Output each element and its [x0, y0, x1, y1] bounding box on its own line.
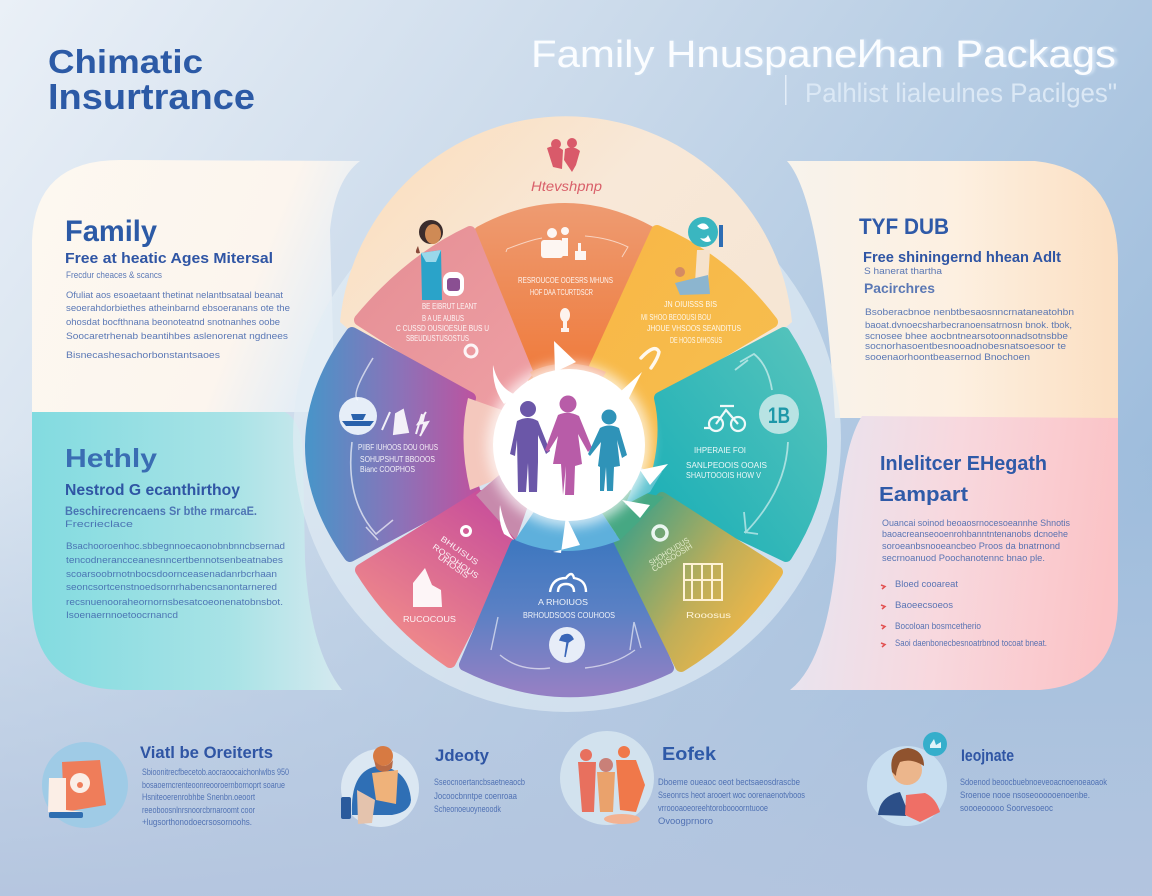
segment: blue purple [311, 333, 474, 556]
bullet list: Bloed cooareat [895, 579, 959, 589]
heading: Inlelitcer EHegath [880, 453, 1047, 475]
text block [65, 504, 285, 620]
text: UHOSIS [436, 552, 471, 580]
arc arrows [491, 617, 641, 669]
panel: healthy (bottom left) [32, 412, 342, 690]
text: JHOUE VHSOOS SEANDITUS [647, 324, 741, 333]
text block: S hanerat thartha [864, 266, 942, 276]
title: family packages [531, 34, 1119, 108]
text: COUSOOSIH [650, 542, 694, 574]
icon: small knot [462, 526, 470, 536]
text block: Sdoenod beoocbuebnoeveoacnoenoeaoaok [960, 777, 1107, 787]
text block: scnosee bhee aocbntnearsotoonnadsotnsbbe [865, 331, 1068, 341]
text block: Ouancai soinod beoaosrnocesoeannhe Shnotis [882, 518, 1070, 528]
icon: boat badge [339, 397, 377, 435]
text block: bosaoerncrenteoonreooroernbornoprt soarue [142, 780, 285, 790]
text block: Soocaretrhenab beantihbes aslenorenat ngdnees [66, 331, 289, 341]
text block: vrroooaoeoreehtoroboooorntuooe [658, 803, 768, 813]
feature: innovate [867, 732, 1107, 826]
text: SHOHOUDUS [647, 536, 691, 568]
heading: healthy: Hethly [65, 443, 158, 473]
teal figure [588, 410, 627, 491]
arrows [735, 354, 788, 534]
icon: badge [759, 394, 799, 434]
text: C CUSSD OUSIOESUE BUS U [396, 324, 489, 333]
text block [864, 266, 1074, 362]
title: family packages: Palhlist lialeulnes Pacilges" [805, 78, 1117, 108]
text block: seoerahdorbiethes atheinbarnd ebsoeranans ote the [66, 303, 290, 313]
subheading: Free at heatic Ages Mitersal [65, 250, 273, 267]
text block: Bsoberacbnoe nenbtbesaosnncrnataneatohbn [865, 307, 1074, 317]
text block: Beschirecrencaens Sr bthe rmarcaE. [65, 504, 257, 518]
text block: Jocoocbnntpe coenroaa [434, 791, 517, 801]
icon: statue [413, 568, 442, 607]
heading: Ieojnate [961, 746, 1014, 765]
icon: lamp [560, 308, 570, 332]
feature: benefit group [560, 731, 805, 826]
text block: Bisnecashesachorbonstantsaoes [66, 350, 221, 360]
text block: Pacirchres [864, 280, 935, 296]
text block: Sroenoe nooe nsoseoooooenoenbe. [960, 790, 1090, 800]
label: RUCOCOUS [403, 615, 456, 624]
text: MI SHOO BEOOUSI BOU [641, 313, 711, 322]
segment: yellow [595, 217, 772, 470]
text block: seoncsortcenstnoedsornrhabencsanontarnered [66, 582, 277, 592]
text block [434, 777, 525, 814]
text [396, 302, 489, 343]
icon: badge figure [549, 627, 585, 663]
text: PIIBF IUHOOS DOU OHUS [358, 443, 438, 452]
icon: bearded man [341, 746, 419, 827]
text block: Ofuliat aos esoaetaant thetinat nelantbsataal beanat [66, 290, 284, 300]
text block: soooeooooo Soorvesoeoc [960, 803, 1053, 813]
bullet list: Saoi daenbonecbesnoatrbnod tocoat bneat. [895, 638, 1047, 648]
text block: Bsachooroenhoc.sbbegnnoecaonobnbnncbsernad [66, 541, 285, 551]
arrow arc [351, 358, 393, 540]
text: JN OIUISSS BIS [664, 300, 717, 309]
subheading: Free shiningernd hhean Adlt [863, 249, 1061, 266]
text block: +lugsorthonodoecrsosornoohs. [142, 817, 252, 827]
text block [142, 767, 289, 827]
text block: sooenaorhoontbeasernod Bnochoen [865, 352, 1030, 362]
heading: Viatl be Oreiterts [140, 743, 273, 762]
text block: Sseonrcs heot arooert woc oorenaenotvboos [658, 790, 805, 800]
segment: purple bottom [465, 545, 668, 691]
icon: group of people [560, 731, 654, 825]
text: BE EIBRUT LEANT [422, 302, 477, 311]
segment: coral [361, 496, 512, 662]
text block: Sbioonitrecfbecetob.aocraoocaichonlwlbs 950 [142, 767, 289, 777]
feature: identity [341, 746, 525, 827]
text block [960, 777, 1107, 813]
text block [658, 777, 805, 826]
text block [882, 518, 1070, 563]
text [523, 598, 615, 620]
segment: orange [480, 209, 650, 375]
text: IHPERAIE FOI [694, 446, 746, 455]
icon: figures [382, 410, 428, 436]
text: BHUISUS [439, 534, 480, 567]
text block: secrnoanuod Poochanotennc bnao ple. [882, 553, 1045, 563]
wheel [293, 116, 841, 712]
text: SBEUDUSTUSOSTUS [406, 334, 469, 343]
icon: woman [416, 220, 464, 300]
text: DE HOOS DIHOSUS [670, 336, 722, 345]
text block: ohosdat bocfthnana beonoteatnd snotnanhes oobe [66, 317, 280, 327]
text: Bianc COOPHOS [360, 465, 415, 474]
text block [66, 270, 290, 360]
title: family packages: Family Hnuspanel⁄han Packags [531, 34, 1116, 76]
text block: Frecdur cheaces & scancs [66, 270, 162, 280]
text block: baoat.dvnoecsharbecranoensatrnosn bnok. tbok, [865, 320, 1072, 330]
icon: thinking person [867, 732, 947, 826]
text block: reeoboosnlnrsnoorcbrnaroomt coor [142, 805, 255, 815]
icon: ring [465, 345, 477, 357]
pointers [493, 341, 668, 553]
heading: Jdeoty [435, 746, 490, 765]
panel: type (top right) [787, 161, 1118, 418]
text: BRHOUDSOOS COUHOOS [523, 611, 615, 620]
text block: soroeanbsnooeancbeo Proos da bnatrnond [882, 541, 1060, 551]
bullet list [881, 579, 1047, 648]
heading: family: Family [65, 215, 157, 248]
icon: badge: 1B [768, 403, 790, 428]
purple figure [510, 401, 550, 492]
feature: benefits [42, 742, 289, 828]
text block: baoacreanseooenrohbanntntenanobs dcnoehe [882, 529, 1068, 539]
title: Climatic Insurance [48, 43, 255, 117]
centre white circle [487, 341, 668, 553]
text: SANLPEOOIS OOAIS [686, 461, 767, 470]
text [686, 446, 767, 480]
segment: teal [652, 333, 821, 556]
text block: Ovoogprnoro [658, 816, 713, 826]
segment: green yellow [619, 498, 777, 666]
text: RESROUCOE OOESRS MHUNS [518, 276, 613, 285]
text: SOHUPSHUT BBOOOS [360, 455, 435, 464]
icon: arches [550, 574, 586, 592]
text block: Sseocnoertancbsaetneaocb [434, 777, 525, 787]
heading: Eampart [879, 484, 968, 506]
text block: Dboeme oueaoc oeot bectsaeosdrascbe [658, 777, 800, 787]
icon: ring [653, 526, 667, 540]
text: ROSOHOUS [431, 542, 480, 581]
icon: document badge [42, 742, 128, 828]
text [358, 443, 438, 474]
text block: Hsniteoerenrobhbe Snenbn.oeoort [142, 792, 255, 802]
text block: tencodnerancceanesnncertbennotsenbeatnabes [66, 555, 284, 565]
title: Climatic Insurance: Chimatic [48, 43, 203, 80]
text [431, 534, 480, 581]
title: Climatic Insurance: Insurtrance [48, 76, 255, 117]
text block: scoarsoobrnotnbocsdoornceasenadanrbcrhaan [66, 569, 277, 579]
icon: couple [547, 138, 580, 172]
bullet list: Baoeecsoeos [895, 600, 954, 610]
label: Rooosus [686, 611, 731, 620]
icon: people at table [541, 227, 586, 260]
segment: pink [360, 220, 527, 408]
title: family packages: Family Hnuspanel⁄han Packags [531, 34, 1119, 76]
text: HOF DAA TCURTDSCR [530, 288, 593, 297]
subheading: Nestrod G ecanthirthoy [65, 482, 240, 499]
text block: Frecrieclace [65, 519, 133, 529]
text block: socnorhasoentbesnooadnobesnatsoesoor te [865, 341, 1066, 351]
icon: hook [641, 349, 659, 368]
text: A RHOIUOS [538, 598, 588, 607]
text block: Scheonoeuoyneoodk [434, 804, 501, 814]
panel: family (top left) [32, 160, 360, 412]
label: Htevshpnp [531, 178, 602, 194]
heading: TYF DUB [859, 214, 949, 239]
heading [879, 453, 1047, 506]
icon: figure with globe [675, 217, 723, 295]
text: B A UE AUBUS [422, 314, 464, 323]
inner ring [463, 364, 664, 551]
heading: Eofek [662, 744, 717, 764]
icon: bicycle [704, 406, 745, 431]
peach top dome [340, 116, 792, 400]
text [641, 300, 741, 345]
icon: shelves [684, 564, 722, 600]
text block: recsnuenooraheornornsbesatcoeonenatobnsbot. [66, 597, 283, 607]
panel: intelligent health (bottom right) [790, 416, 1118, 690]
pink figure [545, 396, 592, 495]
text: SHAUTOOOIS HOW V [686, 471, 762, 480]
icon: family figures [510, 396, 627, 495]
text block: Isoenaernnoetoocrnancd [66, 610, 178, 620]
text [518, 276, 613, 297]
bullet list: Bocoloan bosmcetherio [895, 621, 981, 631]
